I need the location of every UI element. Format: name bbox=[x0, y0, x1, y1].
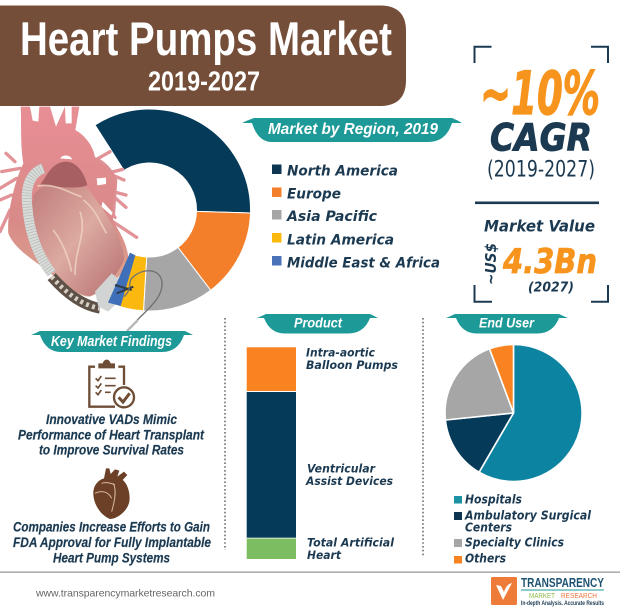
title banner bbox=[0, 6, 406, 106]
legend: Others: Others bbox=[465, 551, 506, 566]
CAGR panel bbox=[474, 47, 608, 302]
website: www.transparencymarketresearch.com bbox=[35, 588, 215, 600]
product labels: Balloon Pumps bbox=[306, 358, 398, 372]
product labels: Heart bbox=[307, 548, 341, 562]
legend: Latin America: Latin America bbox=[287, 232, 394, 248]
ribbon: product: Product bbox=[294, 315, 343, 331]
icon: anatomical heart bbox=[93, 468, 130, 519]
finding 1 text: Performance of Heart Transplant bbox=[18, 427, 204, 442]
finding 2 text bbox=[13, 520, 211, 565]
legend: Ambulatory Surgical Centers: Centers bbox=[465, 520, 512, 535]
title: Heart Pumps Market bbox=[20, 12, 392, 65]
finding 1 text: to Improve Survival Rates bbox=[39, 442, 184, 457]
ribbon: product bbox=[257, 314, 378, 334]
product labels: Intra-aortic bbox=[306, 346, 375, 360]
product labels: Total Artificial bbox=[307, 536, 395, 550]
finding 2 text: Heart Pump Systems bbox=[53, 550, 170, 565]
product labels bbox=[305, 346, 398, 562]
illustration: heart with implanted pump bbox=[0, 107, 162, 320]
ribbon: end user: End User bbox=[479, 315, 535, 331]
legend: Ambulatory Surgical Centers: Ambulatory Surgical bbox=[464, 507, 592, 522]
driveline cable bbox=[124, 271, 162, 320]
donut chart: market by region bbox=[95, 109, 251, 311]
ribbon: end user bbox=[446, 314, 568, 334]
end user legend bbox=[454, 491, 592, 566]
legend: Specialty Clinics: Specialty Clinics bbox=[465, 535, 564, 550]
CAGR label: CAGR bbox=[490, 117, 592, 160]
legend: Middle East and Africa: Middle East & Africa bbox=[287, 255, 440, 271]
legend: Asia Pacific: Asia Pacific bbox=[286, 209, 377, 225]
legend: Ambulatory Surgical Centers bbox=[454, 507, 592, 535]
finding 2 text: FDA Approval for Fully Implantable bbox=[13, 535, 211, 550]
stacked bar chart: product bbox=[247, 347, 296, 559]
logo: Transparency Market Research: MARKET bbox=[529, 591, 555, 600]
finding 1 text bbox=[18, 412, 204, 457]
driveline cable end bbox=[127, 320, 138, 331]
market value label: Market Value bbox=[484, 217, 595, 236]
CAGR period: (2019-2027) bbox=[487, 158, 595, 183]
currency: ~US$ bbox=[482, 243, 500, 285]
product labels: Assist Devices bbox=[305, 474, 393, 488]
pump outflow graft bbox=[27, 168, 52, 273]
finding 2 text: Companies Increase Efforts to Gain bbox=[13, 520, 210, 535]
product labels: Ventricular bbox=[307, 462, 376, 476]
coiled tube bbox=[52, 277, 100, 308]
logo: Transparency Market Research: RESEARCH bbox=[561, 591, 597, 600]
logo: Transparency Market Research bbox=[491, 575, 605, 607]
legend: Hospitals: Hospitals bbox=[465, 491, 522, 506]
icon: clipboard with check bbox=[89, 360, 134, 407]
legend: North America: North America bbox=[287, 164, 398, 180]
pump body bbox=[95, 273, 120, 312]
ribbon: key market findings: Key Market Findings bbox=[51, 334, 172, 350]
logo: Transparency Market Research: In-depth Analysis. Accurate Results bbox=[521, 601, 605, 607]
legend: Europe: Europe bbox=[287, 186, 341, 202]
pie chart: end user bbox=[445, 344, 582, 482]
ribbon: market by region: Market by Region, 2019 bbox=[268, 121, 438, 138]
finding 1 text: Innovative VADs Mimic bbox=[46, 412, 177, 427]
subtitle years: 2019-2027 bbox=[148, 66, 260, 96]
region legend bbox=[272, 164, 440, 271]
value year: (2027) bbox=[528, 280, 574, 296]
ribbon: key market findings bbox=[31, 331, 193, 352]
market value: 4.3Bn bbox=[502, 242, 597, 282]
ribbon: market by region bbox=[242, 118, 462, 142]
